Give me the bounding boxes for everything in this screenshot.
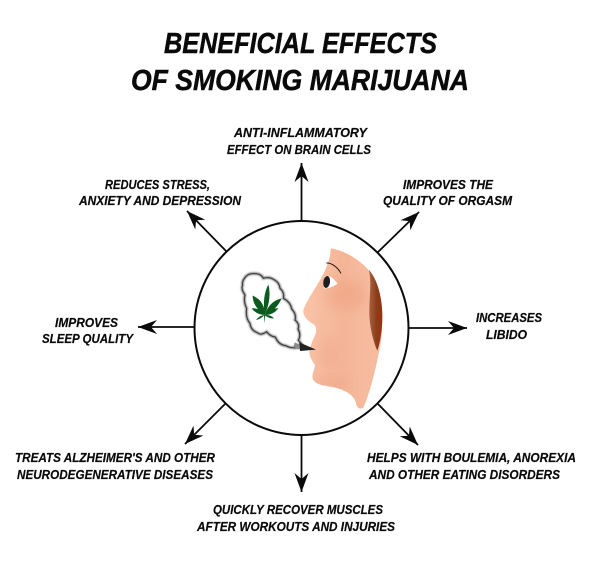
icon: cannabis leaf — [252, 284, 282, 323]
icon: face skin — [303, 248, 382, 408]
label: eating disorders — [367, 451, 576, 482]
label: reduces stress: ANXIETY AND DEPRESSION — [78, 194, 242, 208]
icon: eye — [323, 276, 338, 288]
illustration: face profile — [303, 248, 382, 408]
label: recover muscles — [196, 503, 396, 534]
label: increases libido: INCREASES — [476, 311, 543, 325]
label: improves sleep: SLEEP QUALITY — [42, 332, 135, 346]
title: OF SMOKING MARIJUANA — [131, 65, 469, 97]
arrow: upper right — [378, 212, 419, 252]
label: improves orgasm: QUALITY OF ORGASM — [383, 194, 513, 208]
label: improves sleep — [42, 316, 135, 346]
central circle — [194, 221, 408, 435]
icon: eyebrow — [326, 263, 341, 273]
label: improves orgasm: IMPROVES THE — [403, 178, 494, 192]
label: alzheimer's: TREATS ALZHEIMER'S AND OTHER — [15, 451, 215, 465]
arrow: right — [409, 327, 467, 329]
illustration: smoke and leaf — [242, 274, 316, 351]
title: BENEFICIAL EFFECTS — [164, 28, 438, 60]
label: alzheimer's: NEURODEGENERATIVE DISEASES — [17, 468, 214, 482]
label: alzheimer's — [15, 451, 215, 482]
label: anti-inflammatory: EFFECT ON BRAIN CELLS — [227, 143, 372, 157]
arrow: lower left — [185, 404, 225, 444]
label: recover muscles: AFTER WORKOUTS AND INJURIES — [196, 520, 396, 534]
label: eating disorders: AND OTHER EATING DISORDERS — [368, 468, 561, 482]
label: increases libido: LIBIDO — [486, 328, 527, 342]
label: eating disorders: HELPS WITH BOULEMIA, ANOREXIA — [367, 451, 576, 465]
arrow: left — [138, 326, 194, 328]
label: reduces stress: REDUCES STRESS, — [105, 178, 210, 192]
label: improves orgasm — [383, 178, 513, 208]
label: recover muscles: QUICKLY RECOVER MUSCLES — [213, 503, 384, 517]
label: reduces stress — [78, 178, 242, 208]
label: anti-inflammatory: ANTI-INFLAMMATORY — [233, 126, 369, 140]
arrow: up — [300, 163, 302, 221]
title — [131, 28, 469, 97]
icon: hair — [369, 270, 382, 351]
icon: smoke cloud — [242, 274, 301, 348]
arrow: lower right — [378, 404, 418, 445]
arrow: upper left — [187, 211, 226, 251]
label: increases libido — [476, 311, 543, 342]
icon: joint — [293, 342, 316, 351]
arrow: down — [300, 435, 302, 492]
label: improves sleep: IMPROVES — [55, 316, 119, 330]
label: anti-inflammatory — [227, 126, 372, 157]
